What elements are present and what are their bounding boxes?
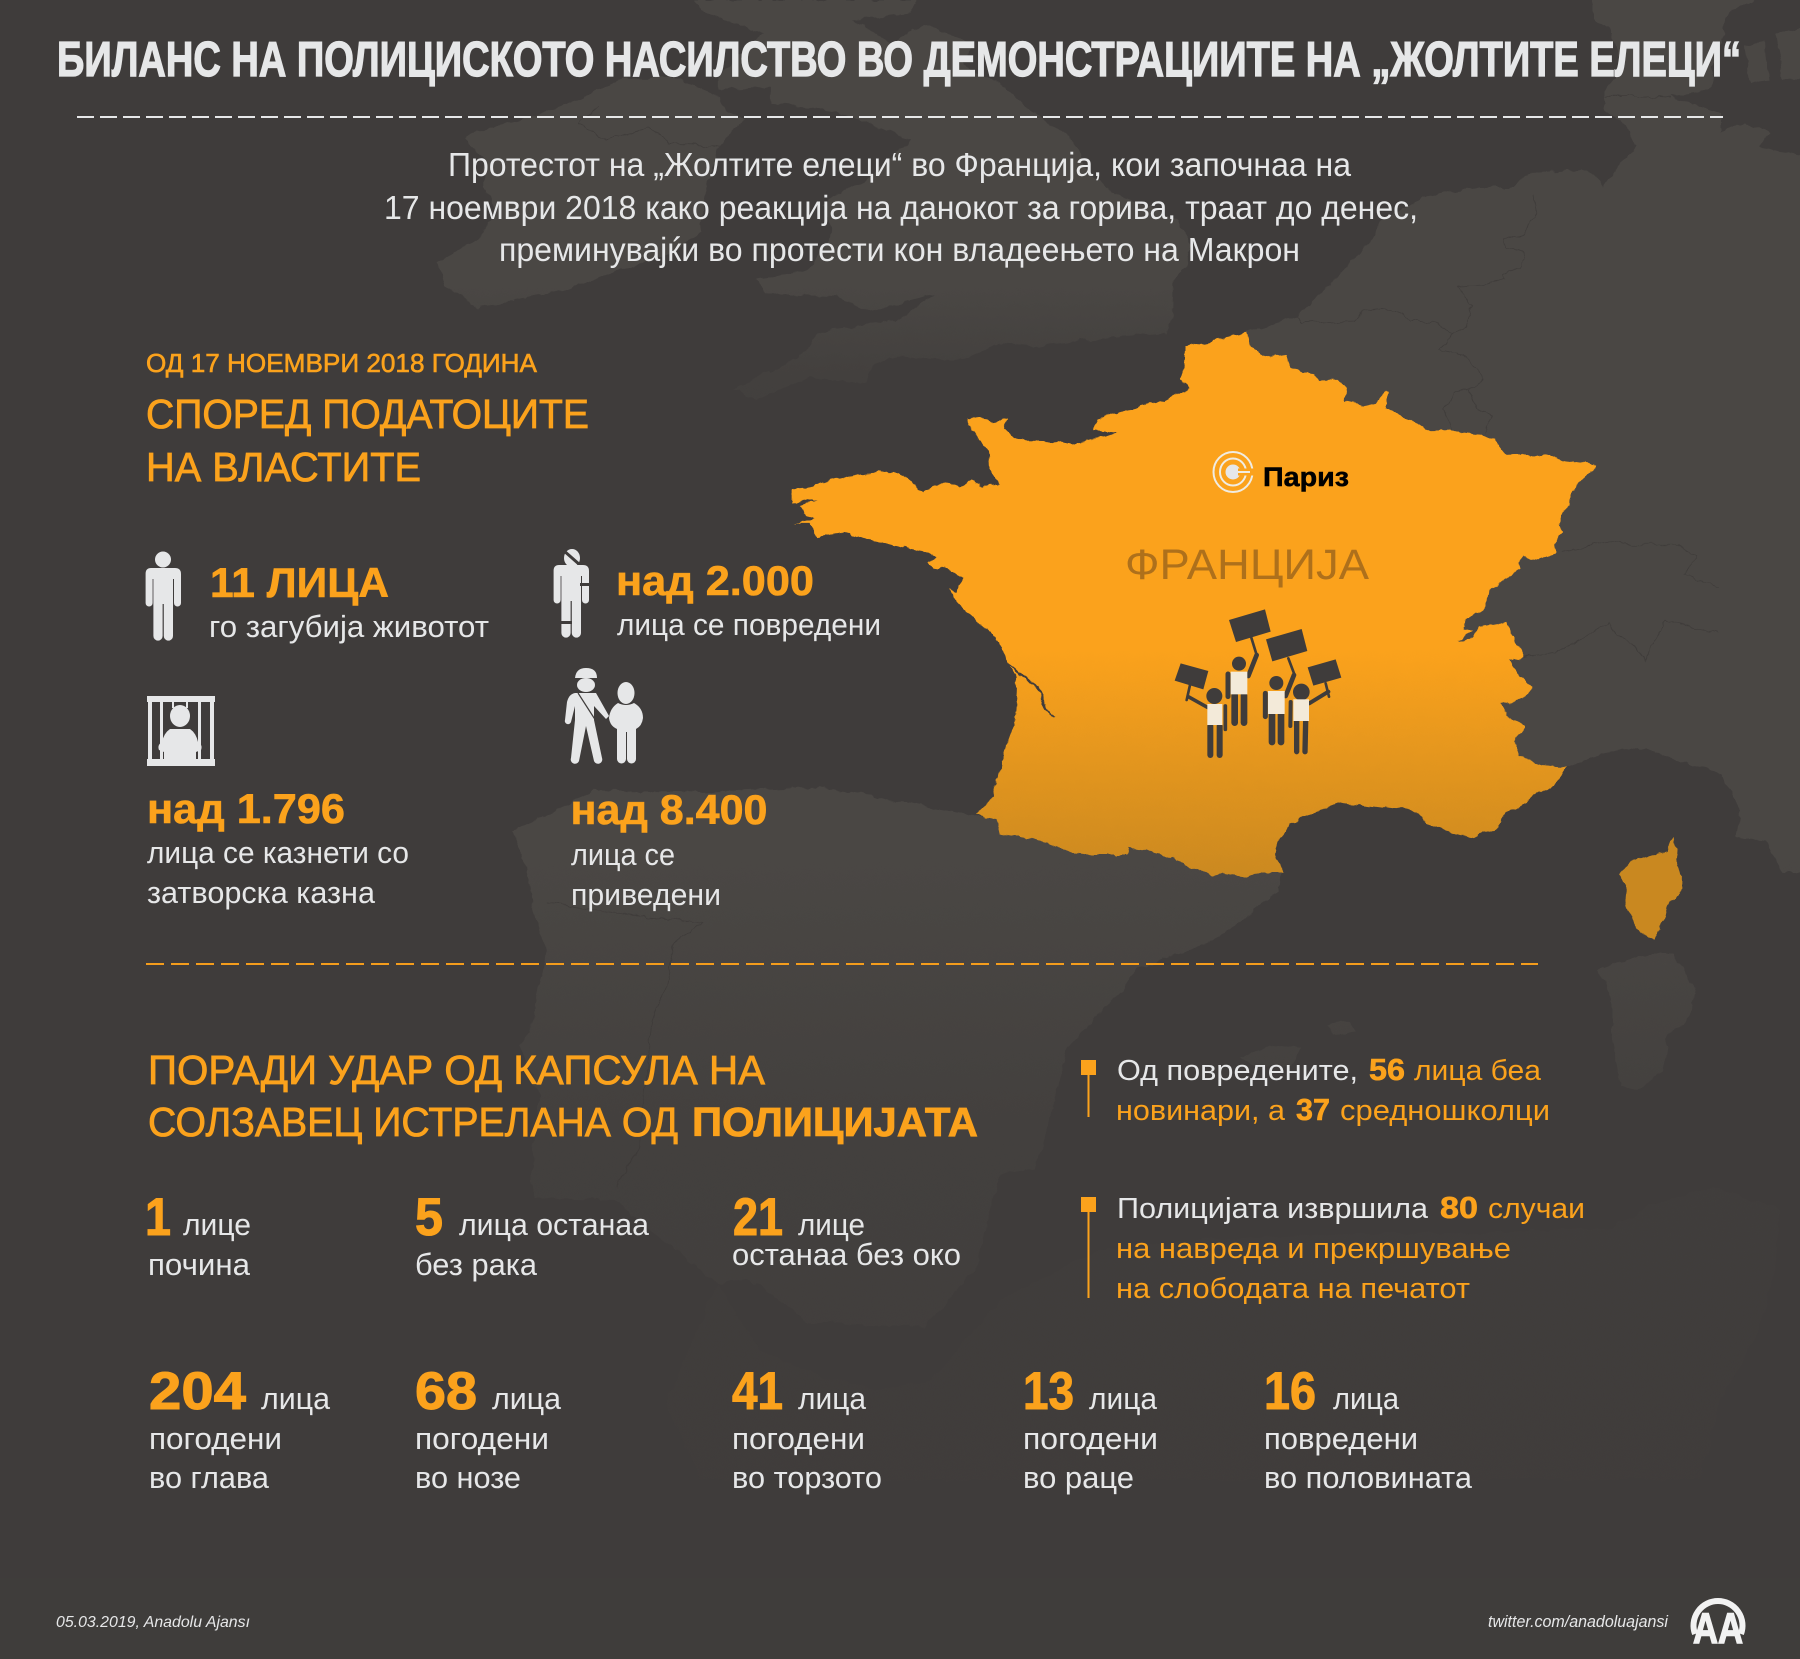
- stat: 16 injured in the groin: повредени: [1264, 1421, 1418, 1456]
- stat: 204 hit in the head: во глава: [149, 1460, 270, 1495]
- section heading: authorities data: НА ВЛАСТИТЕ: [146, 444, 421, 490]
- borders: Portugal: [547, 902, 702, 1188]
- bullet: journalists and students: Од повредените,: [1117, 1055, 1358, 1087]
- bullet: journalists and students: 37: [1296, 1092, 1330, 1127]
- stat: 41 hit in the torso: погодени: [732, 1421, 865, 1456]
- bullet: press freedom violations: на слободата на печатот: [1116, 1273, 1470, 1305]
- stat: 41 hit in the torso: во торзото: [732, 1460, 882, 1495]
- stat: 1796 imprisoned: [147, 785, 409, 910]
- stat: 21 lost an eye: останаа без око: [732, 1237, 961, 1272]
- stat: 1 dead: лице: [183, 1207, 251, 1242]
- section heading: tear gas capsule: ПОЛИЦИЈАТА: [692, 1099, 978, 1145]
- stat: 11 deaths: [209, 559, 489, 644]
- section divider: [146, 963, 1538, 965]
- stat: 11 deaths: 11 ЛИЦА: [210, 559, 389, 606]
- stat: 2000 injured: над 2.000: [616, 557, 814, 604]
- section heading: tear gas capsule: СОЛЗАВЕЦ ИСТРЕЛАНА ОД: [148, 1099, 678, 1145]
- footer: social link: twitter.com/anadoluajansi: [1488, 1612, 1669, 1631]
- Gironde estuary: [1008, 664, 1054, 718]
- logo: Anadolu Agency: AA: [1693, 1605, 1743, 1653]
- stat: 1 dead: почина: [148, 1247, 251, 1282]
- stat: 204 hit in the head: 204: [149, 1362, 247, 1421]
- land: Iberian peninsula: [512, 787, 1283, 1327]
- stat: 1796 imprisoned: затворска казна: [147, 875, 376, 910]
- stat: 13 hit in the arms: погодени: [1023, 1421, 1158, 1456]
- bullet: journalists and students: 56: [1369, 1052, 1405, 1087]
- stat: 8400 detained: над 8.400: [570, 786, 768, 833]
- stat: 13 hit in the arms: 13: [1023, 1362, 1074, 1421]
- stat: 13 hit in the arms: во раце: [1023, 1460, 1134, 1495]
- bullet: journalists and students: новинари, а: [1116, 1095, 1286, 1127]
- footer: date and source: 05.03.2019, Anadolu Ajansı: [56, 1614, 250, 1631]
- label: France: ФРАНЦИЈА: [1125, 541, 1369, 589]
- land: Great Britain: [694, 0, 1191, 400]
- land: continental Europe: [1245, 0, 1800, 872]
- stat: 16 injured in the groin: во половината: [1264, 1460, 1473, 1495]
- land: Danish and Swedish islands: [1745, 25, 1800, 84]
- stat: 5 lost a hand: [415, 1188, 650, 1282]
- bullet: press freedom violations: Полицијата извршила: [1117, 1193, 1429, 1225]
- stat: 2000 injured: лица се повредени: [617, 607, 881, 642]
- stat: 204 hit in the head: [149, 1362, 331, 1495]
- placard sticks and arms: [1187, 637, 1329, 755]
- section heading: authorities data: ОД 17 НОЕМВРИ 2018 ГОДИНА: [146, 348, 538, 378]
- borders: Northern Ireland: [579, 107, 719, 147]
- stat: 13 hit in the arms: [1023, 1362, 1158, 1495]
- footer band: [0, 1578, 1800, 1659]
- stat: 204 hit in the head: лица: [261, 1381, 331, 1416]
- Corsica: [1620, 837, 1681, 938]
- stat: 68 hit in the legs: [415, 1362, 562, 1495]
- stat: 5 lost a hand: лица останаа: [459, 1207, 650, 1242]
- stat: 16 injured in the groin: 16: [1264, 1362, 1316, 1421]
- bullet: press freedom violations: [1081, 1190, 1585, 1305]
- stat: 16 injured in the groin: лица: [1333, 1381, 1400, 1416]
- icon: person: [146, 552, 181, 641]
- stat: 204 hit in the head: погодени: [149, 1421, 282, 1456]
- bullet: press freedom violations: на навреда и прекршување: [1116, 1233, 1511, 1265]
- icon: injured person: [554, 549, 591, 638]
- stat: 21 lost an eye: лице: [798, 1207, 865, 1242]
- stat: 1 dead: [145, 1188, 251, 1282]
- heads: [1206, 657, 1310, 704]
- bullet: journalists and students: [1081, 1052, 1550, 1127]
- stat: 41 hit in the torso: 41: [732, 1362, 783, 1421]
- stat: 13 hit in the arms: лица: [1089, 1381, 1158, 1416]
- bullet: journalists and students: средношколци: [1340, 1095, 1550, 1127]
- stat: 8400 detained: [570, 786, 768, 912]
- stat: 21 lost an eye: [732, 1188, 961, 1272]
- intro text: преминувајќи во протести кон владеењето на Макрон: [499, 231, 1300, 268]
- placards: [1175, 609, 1341, 689]
- label: Paris: Париз: [1263, 462, 1349, 492]
- stat: 16 injured in the groin: [1264, 1362, 1473, 1495]
- icon: police officer with detainee: [565, 668, 643, 764]
- intro text: Протестот на „Жолтите елеци“ во Франција, кои започнаа на: [448, 146, 1352, 183]
- icon: prisoner behind bars: [147, 696, 215, 766]
- borders: Switzerland and Italy: [1519, 541, 1720, 659]
- section heading: tear gas capsule: [148, 1047, 978, 1145]
- vests: [1207, 672, 1309, 725]
- stat: 68 hit in the legs: погодени: [415, 1421, 549, 1456]
- stat: 68 hit in the legs: лица: [492, 1381, 562, 1416]
- background map of western Europe: [439, 0, 1800, 1480]
- section heading: authorities data: СПОРЕД ПОДАТОЦИТЕ: [146, 391, 589, 437]
- section heading: authorities data: [146, 348, 589, 490]
- stat: 68 hit in the legs: 68: [415, 1362, 477, 1421]
- France outline: [791, 334, 1596, 877]
- icon: protesters with placards: [1175, 609, 1341, 755]
- land: North Africa: [665, 1188, 1780, 1480]
- borders: Benelux and Germany: [1296, 97, 1671, 433]
- bullet: press freedom violations: случаи: [1488, 1193, 1585, 1225]
- stat: 41 hit in the torso: [732, 1362, 882, 1495]
- stat: 1796 imprisoned: лица се казнети со: [147, 835, 409, 870]
- stat: 41 hit in the torso: лица: [798, 1381, 867, 1416]
- stat: 8400 detained: лица се: [571, 837, 675, 872]
- intro text: 17 ноември 2018 како реакција на данокот за горива, траат до денес,: [384, 189, 1418, 226]
- stat: 11 deaths: го загубија животот: [209, 609, 489, 644]
- stat: 8400 detained: приведени: [571, 877, 721, 912]
- icon: Paris marker: [1214, 452, 1254, 492]
- map: France with Corsica: [791, 334, 1681, 938]
- stat: 2000 injured: [616, 557, 881, 642]
- title divider: [77, 116, 1723, 118]
- stat: 68 hit in the legs: во нозе: [415, 1460, 521, 1495]
- stat: 5 lost a hand: без рака: [415, 1247, 538, 1282]
- section heading: tear gas capsule: ПОРАДИ УДАР ОД КАПСУЛА НА: [148, 1047, 766, 1093]
- land: Balearic islands: [1240, 1022, 1355, 1068]
- land: Ireland: [439, 78, 745, 307]
- stat: 21 lost an eye: 21: [733, 1188, 783, 1247]
- intro text: [384, 146, 1418, 268]
- stat: 5 lost a hand: 5: [415, 1188, 443, 1247]
- land: Sardinia: [1597, 953, 1696, 1091]
- stat: 1 dead: 1: [145, 1188, 171, 1247]
- bullet: press freedom violations: 80: [1440, 1190, 1478, 1225]
- stat: 1796 imprisoned: над 1.796: [147, 785, 345, 832]
- bullet: journalists and students: лица беа: [1414, 1055, 1542, 1087]
